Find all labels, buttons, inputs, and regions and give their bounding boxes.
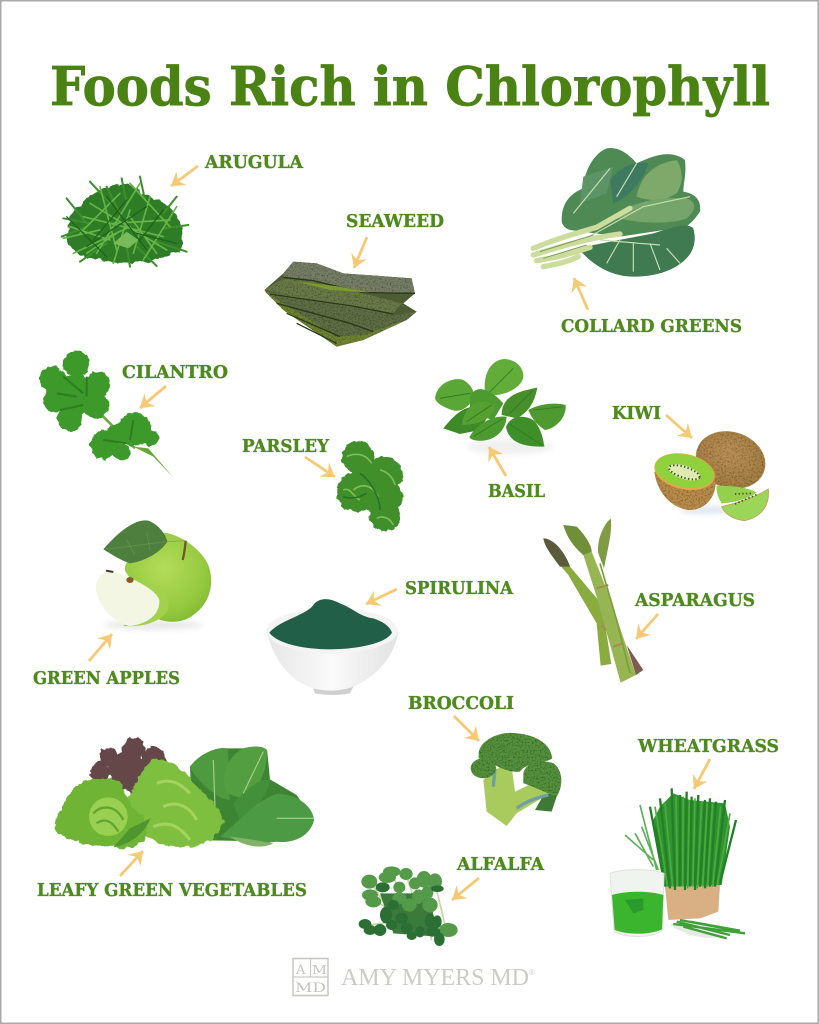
icon: AM MD monogram [293, 958, 328, 996]
image: parsley sprig [337, 441, 403, 532]
arrow [366, 589, 397, 604]
arrow [452, 878, 479, 900]
arrow [636, 614, 658, 639]
arrow [666, 415, 692, 438]
arrow [171, 166, 198, 186]
label: ALFALFA [456, 855, 544, 875]
image: alfalfa sprouts [360, 868, 456, 945]
image: seaweed sheets [264, 262, 417, 347]
image: green apple and slice [96, 520, 211, 630]
item: broccoli [408, 694, 561, 826]
item: green apples [33, 520, 211, 689]
item: wheatgrass [610, 737, 779, 938]
label: PARSLEY [242, 437, 329, 457]
icon: AM MD monogram: MD [295, 981, 326, 996]
icon: AM MD monogram: A [295, 963, 306, 978]
item: alfalfa [360, 855, 544, 945]
arrow [305, 457, 335, 477]
item: cilantro [39, 351, 228, 477]
arrow [120, 851, 143, 876]
image: kiwi fruit [651, 422, 773, 521]
label: BROCCOLI [408, 694, 514, 714]
item: spirulina [266, 579, 513, 695]
image: broccoli floret [471, 733, 561, 826]
image: wheatgrass and juice glass [610, 788, 745, 938]
image: assorted lettuce [55, 737, 314, 848]
arrow [694, 759, 710, 789]
label: LEAFY GREEN VEGETABLES [37, 881, 307, 901]
image: arugula pile [62, 177, 188, 267]
arrow [489, 447, 506, 476]
label: WHEATGRASS [637, 737, 779, 757]
label: SEAWEED [346, 212, 444, 232]
label: KIWI [612, 404, 661, 424]
item: collard greens [533, 148, 742, 337]
arrow [354, 237, 367, 268]
label: CILANTRO [122, 363, 228, 383]
label: SPIRULINA [405, 579, 513, 599]
arrow [454, 716, 479, 741]
label: BASIL [488, 482, 545, 502]
logo: Amy Myers MD [293, 958, 535, 996]
item: basil [435, 359, 566, 502]
item: seaweed [264, 212, 444, 347]
item: asparagus [543, 518, 755, 683]
icon: AM MD monogram: M [312, 963, 327, 977]
label: GREEN APPLES [33, 669, 180, 689]
item: parsley [242, 437, 403, 532]
item: kiwi [612, 404, 773, 521]
wordmark: AMY MYERS MD [341, 965, 529, 991]
image: basil leaves [435, 359, 566, 454]
arrow [574, 278, 588, 310]
title: Foods Rich in Chlorophyll [50, 55, 770, 118]
item: arugula [62, 153, 303, 267]
image: collard greens bunch [533, 148, 700, 277]
arrow [89, 634, 112, 661]
label: COLLARD GREENS [561, 317, 742, 337]
arrow [140, 386, 166, 408]
image: asparagus spears [543, 518, 643, 683]
label: ASPARAGUS [634, 591, 755, 611]
label: ARUGULA [204, 153, 303, 173]
image: bowl of spirulina powder [266, 599, 398, 695]
image: cilantro sprig [39, 351, 173, 477]
registered mark: ® [529, 968, 535, 977]
item: leafy green vegetables [37, 737, 314, 901]
